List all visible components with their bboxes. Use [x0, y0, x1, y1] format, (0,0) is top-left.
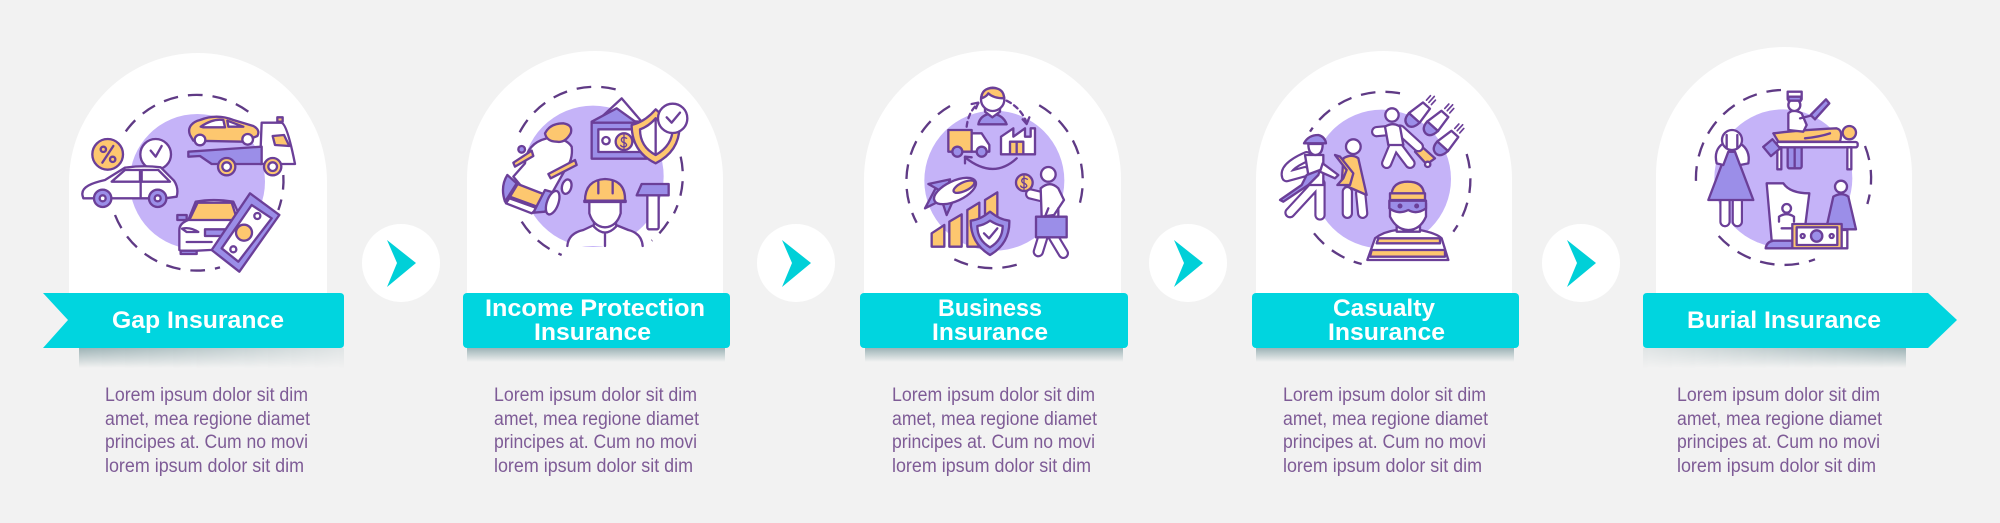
- body text: lorem ipsum dolor sit dim: [494, 456, 693, 477]
- ribbon shadow: [467, 348, 725, 362]
- title ribbon: [860, 293, 1128, 348]
- body text: amet, mea regione diamet: [494, 409, 700, 430]
- panel: burial insurance: [1643, 47, 1957, 477]
- heading: Business: [938, 295, 1042, 322]
- title ribbon: [463, 293, 730, 348]
- ribbon shadow: [79, 348, 344, 368]
- arrow 1: [362, 224, 440, 302]
- body text: principes at. Cum no movi: [1283, 432, 1486, 453]
- body text: Lorem ipsum dolor sit dim: [892, 385, 1095, 406]
- heading: Insurance: [932, 319, 1048, 346]
- heading: Insurance: [534, 319, 651, 346]
- heading: [1328, 295, 1445, 346]
- card background: [1256, 51, 1512, 293]
- panel: business insurance: [860, 50, 1128, 477]
- heading: Income Protection: [485, 295, 705, 322]
- heading: [932, 295, 1048, 346]
- body text: lorem ipsum dolor sit dim: [1677, 456, 1876, 477]
- body text: amet, mea regione diamet: [892, 409, 1098, 430]
- heading: [485, 295, 705, 346]
- arrow 4: [1542, 224, 1620, 302]
- title ribbon: [1643, 293, 1957, 348]
- body text: principes at. Cum no movi: [494, 432, 697, 453]
- body text: lorem ipsum dolor sit dim: [1283, 456, 1482, 477]
- ribbon shadow: [1256, 348, 1514, 362]
- icon: income protection illustration: [503, 87, 687, 255]
- body text: [1677, 385, 1883, 477]
- body text: Lorem ipsum dolor sit dim: [105, 385, 308, 406]
- body text: [1283, 385, 1489, 477]
- card background: [864, 50, 1121, 293]
- body text: [494, 385, 700, 477]
- arrow 3: [1149, 224, 1227, 302]
- body text: principes at. Cum no movi: [1677, 432, 1880, 453]
- card background: [69, 53, 327, 293]
- body text: amet, mea regione diamet: [1677, 409, 1883, 430]
- title ribbon: [1252, 293, 1519, 348]
- panel: income protection insurance: [463, 51, 730, 477]
- body text: lorem ipsum dolor sit dim: [892, 456, 1091, 477]
- icon: casualty illustration: [1280, 91, 1470, 264]
- title ribbon: [43, 293, 344, 348]
- icon: burial illustration: [1696, 90, 1871, 265]
- body text: principes at. Cum no movi: [892, 432, 1095, 453]
- panel: gap insurance: [43, 53, 344, 477]
- icon: gap insurance illustration: [82, 95, 295, 272]
- ribbon shadow: [1643, 348, 1906, 368]
- icon: business illustration: [906, 88, 1083, 268]
- body text: Lorem ipsum dolor sit dim: [494, 385, 697, 406]
- body text: amet, mea regione diamet: [105, 409, 311, 430]
- heading: Insurance: [1328, 319, 1445, 346]
- body text: Lorem ipsum dolor sit dim: [1677, 385, 1880, 406]
- body text: [105, 385, 311, 477]
- heading: Gap Insurance: [112, 307, 284, 334]
- heading: Casualty: [1333, 295, 1435, 322]
- panel: casualty insurance: [1252, 51, 1519, 477]
- card background: [1656, 47, 1912, 293]
- body text: Lorem ipsum dolor sit dim: [1283, 385, 1486, 406]
- arrow 2: [757, 224, 835, 302]
- body text: amet, mea regione diamet: [1283, 409, 1489, 430]
- body text: [892, 385, 1098, 477]
- card background: [467, 51, 723, 293]
- body text: principes at. Cum no movi: [105, 432, 308, 453]
- ribbon shadow: [865, 348, 1123, 362]
- body text: lorem ipsum dolor sit dim: [105, 456, 304, 477]
- heading: Burial Insurance: [1687, 307, 1881, 334]
